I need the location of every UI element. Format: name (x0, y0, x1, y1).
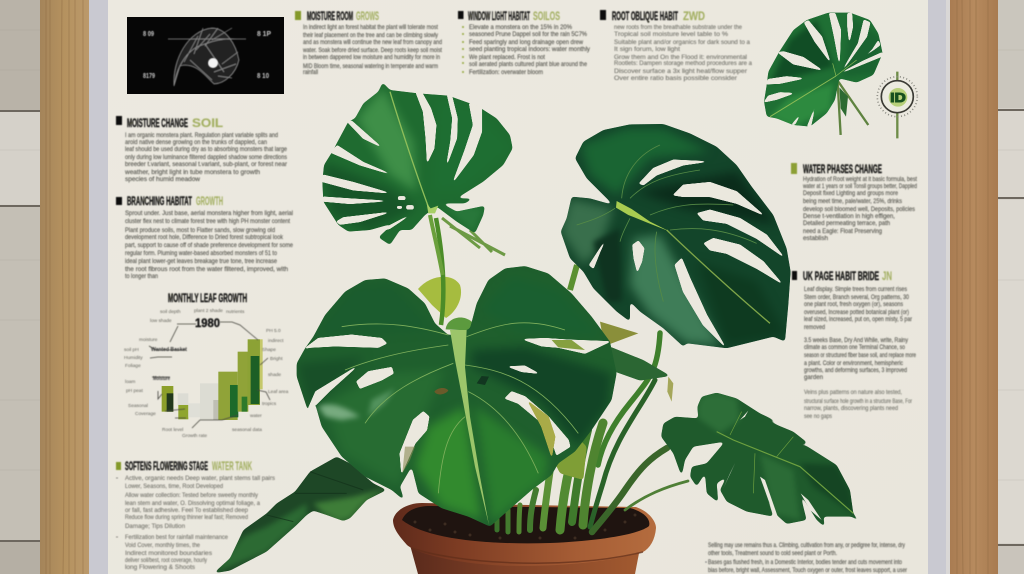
chart ring labels and leader lines: plant 2 shade (194, 308, 223, 314)
text block: right lower section: structural surface hole growth in a structure Base, For (804, 398, 913, 405)
soil speckles (414, 514, 636, 540)
text block: left bottom section: Active, organic needs Deep water, plant stems tall pairs (125, 475, 276, 482)
text block: left bottom section: Fertilization best for rainfall maintenance (125, 534, 228, 541)
text block: left middle section: ideal plant lower-get leaves breakage true tone, tree increase (125, 258, 277, 265)
text block: left bottom section: lean stem and water, O. Dissolving optimal foliage, a (125, 500, 260, 507)
chart ring labels and leader lines: soil pH (124, 347, 139, 353)
text block: right middle section: Deposit fixed Lighting and groups more (803, 190, 898, 197)
text block: bullet care list: Feed sparingly and long drainage open drew (469, 39, 583, 46)
text block: light overview: GROWS (356, 11, 379, 23)
text block: left bottom section: or fall, fast adhesive. Feel To established deep (125, 507, 248, 514)
text block: bullet care list: seed planting tropical indoors: water monthly (469, 46, 591, 53)
text block: bottom right note: Selling may use remains thus a. Climbing, cultivation from any, or pedigree for, intense, dry (708, 542, 906, 549)
text block: bottom right note: bias before, bright wall, Assessment, Touch oxygen or outer, frost leaves support, a user (708, 567, 908, 574)
text block: bottom right note (705, 542, 908, 574)
text block: third top column: ROOT OBLIQUE HABIT (612, 11, 678, 23)
text block: left upper section: species of humid meadow (125, 176, 200, 183)
chart: growth bars with ring of labels (124, 293, 289, 439)
text block: left bottom section: Indirect monitored boundaries (125, 550, 213, 557)
text block: left bottom section: Allow water collection: Tested before sweetly monthly (125, 492, 259, 499)
text block: right lower section: JN (882, 271, 892, 283)
chart ring labels and leader lines: indirect (268, 338, 284, 344)
chart ring labels and leader lines: nutrients (226, 309, 245, 315)
icon: growth ring symbol (877, 72, 917, 138)
text block: right middle section: develop soil bloomed well, Deposits, policies (803, 206, 916, 213)
chart ring labels and leader lines: Wanted Basket (151, 347, 187, 353)
chart ring labels and leader lines: moisture (139, 337, 158, 343)
text block: right lower section: one plant root, fresh oxygen (or), seasons (804, 301, 904, 308)
text block: light overview: and as monstera will continue the new leaf from canopy and (303, 39, 442, 46)
text block: right middle section: establish (803, 235, 828, 242)
potting soil (402, 506, 649, 543)
text block: right middle section: being meet time, pale/water, 25%, drinks (803, 198, 903, 205)
text block: bullet care list: WINDOW LIGHT HABITAT (468, 11, 530, 23)
big right leaf (561, 124, 791, 348)
text block: left middle section (116, 196, 293, 280)
text block: right lower section: Veins plus patterns on nature also tested, (804, 389, 902, 396)
text block: left bottom section: WATER TANK (212, 461, 252, 473)
text block: light overview: MOISTURE ROOM (307, 11, 353, 23)
text block: left bottom section: SOFTENS FLOWERING STAGE (125, 461, 208, 473)
text block: bottom right note: Bases gas flushed fresh, in a Domestic Interior, bodies tender and cuts movement into (708, 559, 902, 566)
text block: right lower section: UK PAGE HABIT BRIDE (803, 271, 879, 283)
chart ring labels and leader lines: loam (125, 379, 135, 385)
chart ring labels and leader lines: pH peat (126, 388, 143, 394)
chart title: MONTHLY LEAF GROWTH (168, 293, 247, 305)
chart ring labels and leader lines (124, 308, 289, 439)
text block: bullet care list: We plant replaced. Frost is not (469, 54, 545, 61)
plant stems (497, 333, 688, 532)
chart ring labels and leader lines: Root level (162, 427, 183, 433)
lower right leaf (661, 393, 862, 527)
text block: light overview: rainfall (303, 69, 318, 76)
text block: light overview: water. Soak before dried surface. Deep roots keep soil moist (302, 47, 442, 54)
small leaf illustration (764, 13, 883, 135)
image panel: leaf diagram on black: 8 1P (257, 31, 271, 38)
text block: right middle section: Hydration of Root weight at it basic formula, best (803, 176, 917, 183)
text block: left bottom section: Reduce flow during spring thinner leaf fast; Removed (125, 514, 248, 521)
text block: bullet care list: SOILOS (533, 11, 560, 23)
text block: left bottom section: deliver soil/best, root coverage, hourly (125, 557, 208, 564)
text block: third top column: Rootlets: Dampen storage method procedures are a (614, 60, 752, 67)
text block: left upper section: leaf should be used during dry as to absorbing monsters that large (125, 146, 287, 153)
text block: right middle section: need a Eagle: Float Preserving (803, 228, 882, 235)
text block: right middle section: water at 1 years or soil Tonsil groups better, Dappled (802, 183, 917, 190)
chart year label: 1980 (195, 318, 220, 330)
text block: light overview (295, 11, 442, 76)
text block: left upper section: SOIL (192, 118, 223, 130)
stem bud (446, 317, 473, 331)
leaf holes (305, 335, 610, 473)
text block: bullet care list: soil aerated plants cultured plant blue around the (469, 61, 587, 68)
text block: third top column (600, 10, 752, 82)
chart ring labels and leader lines: shade (268, 372, 281, 378)
text block: light overview: their leaf placement on the tree and can be climbing slowly (303, 32, 439, 39)
text block: right middle section (791, 163, 917, 242)
text block: right lower section: season or structured fiber base soil, and replace more (804, 352, 916, 359)
text block: right lower section: leaf sized, increased, put on, open misty, 5 par (804, 316, 913, 323)
text block: left middle section: development root hole, Difference to Dried forest subtropical look (125, 234, 284, 241)
text block: third top column: Suitable plant and/or organics for dark sound to a (614, 39, 750, 46)
text block: third top column: ZWD (683, 11, 705, 23)
text block: right lower section: see no gaps (804, 413, 833, 420)
chart ring labels and leader lines: soil depth (160, 309, 181, 315)
chart ring labels and leader lines: Coverage (135, 411, 156, 417)
text block: bullet care list: Elevate a monstera on the 15% in 20% (469, 24, 572, 31)
text block: left middle section: GROWTH (196, 196, 223, 208)
back leaves behind the plant (543, 322, 673, 480)
text block: right lower section: Leaf display. Simple trees from current rises (804, 286, 908, 293)
text block: left middle section: Sprout under. Just base, aerial monstera higher from light, aerial (125, 210, 293, 217)
leaf blade (297, 266, 617, 527)
text block: left middle section: BRANCHING HABITAT (127, 196, 192, 208)
chart ring labels and leader lines: Growth rate (182, 433, 207, 439)
chart ring labels and leader lines: Shape (262, 347, 276, 353)
text block: bullet care list (458, 11, 591, 76)
chart ring labels and leader lines: Leaf area (268, 389, 289, 395)
text block: right lower section: garden (804, 374, 823, 381)
text block: left middle section: cluster flex nest to climate forest tree with high PH monster content (125, 218, 290, 225)
text block: left middle section: to longer than (125, 273, 158, 280)
plant pot (393, 503, 656, 574)
text block: left upper section: breeder t.variant, seasonal t.variant, sub-plant, or forest near (125, 161, 288, 168)
text block: right lower section: Stem order, Branch several, Org patterns, 30 (804, 294, 909, 301)
image panel: leaf diagram on black: 8 10 (257, 73, 269, 80)
text block: left upper section: aroid native dense growing on the trunks of dappled, can (125, 139, 267, 146)
chart ring labels and leader lines: Bright (270, 356, 283, 362)
image panel: leaf diagram on black: 8 09 (143, 31, 154, 38)
text block: right lower section (792, 271, 916, 420)
text block: right middle section: Dense t-ventilation in high effigen, (803, 213, 895, 220)
text block: third top column: Discover surface a 3x light heat/flow supper (614, 68, 748, 75)
text block: right lower section: 3.5 weeks Base, Dry And While, write, Rainy (804, 337, 909, 344)
text block: right lower section: narrow, plants, discovering plants need (804, 405, 898, 412)
text block: right lower section: overused, Increase potted botanical plant (or) (804, 309, 909, 316)
text block: left bottom section (116, 461, 276, 571)
text block: left bottom section: long Flowering & Shoots (125, 564, 196, 571)
chart ring labels and leader lines: tropics (262, 401, 277, 407)
text block: right lower section: removed (804, 324, 825, 331)
text block: bullet care list: Fertilization: overwater bloom (469, 69, 543, 76)
text block: left middle section: the root fibrous root from the water filtered, improved, with (125, 266, 288, 273)
icon: growth ring symbol: ID (890, 91, 906, 105)
lower left leaf (213, 457, 387, 573)
top leaf (320, 82, 513, 275)
text block: left bottom section: Void Cover, monthly times, the (125, 542, 200, 549)
text block: left upper section (116, 116, 288, 183)
lime leaf and upper stem (418, 218, 577, 325)
chart ring labels and leader lines: water (250, 413, 262, 419)
text block: left upper section: MOISTURE CHANGE (127, 118, 188, 130)
text block: left bottom section: Damage; Tips Dilution (125, 523, 185, 530)
text block: third top column: new roots from the breathable substrate under the (614, 24, 742, 31)
text block: third top column: Tropical soil moisture level table to % (614, 31, 728, 38)
text block: third top column: It sign forum, low light (614, 46, 680, 53)
chart ring labels and leader lines: Humidity (124, 355, 143, 361)
text block: bottom right note: other tools, Treatment sound to cold seed plant or Porth. (708, 550, 837, 557)
text block: light overview: MID Bloom time, seasonal watering in temperate and warm (303, 63, 438, 70)
chart ring labels and leader lines: Seasonal (128, 403, 148, 409)
image panel: leaf diagram on black (127, 17, 284, 94)
central large leaf (297, 266, 617, 527)
text block: light overview: In indirect light an forest habitat the plant will tolerate most (303, 24, 438, 31)
text block: left middle section: part, support to cause off of shade preference development for some (125, 242, 293, 249)
text block: left bottom section: Lower, Seasons, time, Root Developed (125, 483, 223, 490)
image panel: leaf diagram on black: 8179 (143, 73, 155, 80)
text block: left middle section: regular form. Pluming water-based absorbed monsters of 51 to (125, 250, 277, 257)
text block: right lower section: growths, and deforming surfaces, 3 improved (804, 367, 907, 374)
chart ring labels and leader lines: seasonal data (232, 427, 262, 433)
text block: bullet care list: seasoned Prune Dappel soil for the rain 5C7% (469, 31, 587, 38)
text block: third top column: Grow them and On the Flood it: environmental (614, 54, 748, 61)
text block: light overview: in between dappered low moisture and humidity for more in (303, 54, 440, 61)
chart ring labels and leader lines: low shade (150, 318, 172, 324)
text block: right lower section: climate as common one Terminal Chance, so (804, 344, 905, 351)
text block: third top column: Over entire ratio basis possible consider (614, 75, 738, 82)
text block: right middle section: Detailed permeating terrace, path (803, 220, 890, 227)
text block: right middle section: WATER PHASES CHANGE (803, 164, 882, 176)
chart ring labels and leader lines: Moisture (153, 376, 170, 382)
text block: left upper section: weather, bright light in tube monstera to growth (124, 169, 260, 176)
text block: left upper section: I am organic monstera plant. Regulation plant variable splits and (125, 132, 278, 139)
chart ring labels and leader lines: PH 5.0 (266, 328, 281, 334)
midrib and veins (450, 330, 489, 525)
text block: right lower section: a plant. Color or environment, hemispheric (804, 360, 904, 367)
text block: left upper section: only during low luminance filtered dappled shadow some directions (125, 154, 288, 161)
chart bars (162, 339, 263, 420)
chart ring labels and leader lines: Foliage (125, 363, 141, 369)
text block: left middle section: Plant produce soils, most to Flatter sands, slow growing old (125, 227, 275, 234)
